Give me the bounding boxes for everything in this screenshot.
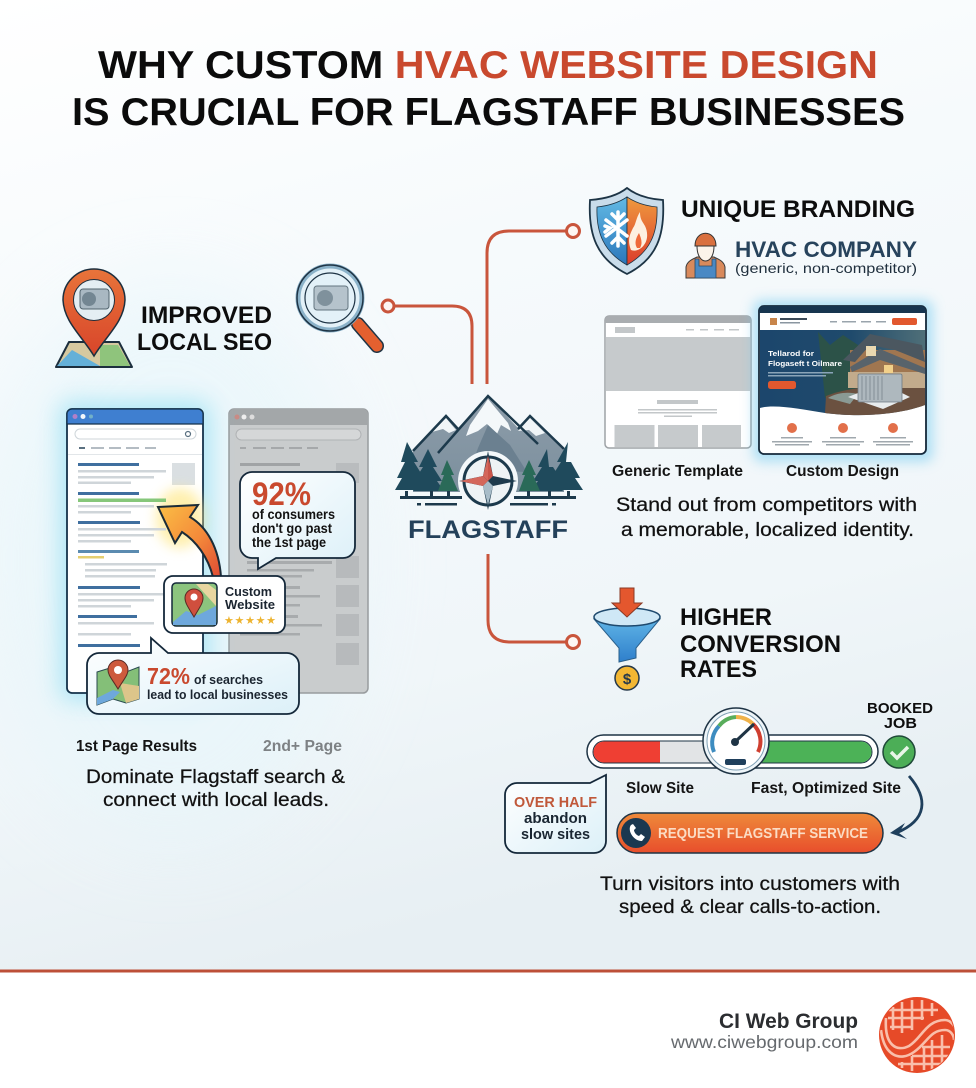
callout: 72% of searches [87,638,299,714]
panel: custom design website [753,300,933,462]
panel: custom design website: Tellarod for [768,349,814,358]
card: custom website: ★★★★★ [224,615,276,627]
footer: www.ciwebgroup.com [670,1032,858,1052]
heading: higher conversion rates: RATES [680,656,757,683]
card: custom website [164,576,285,633]
callout: 92% of consumers: 92% [252,476,311,512]
heading: higher conversion rates: HIGHER [680,604,772,631]
icon: booked job check: JOB [884,715,917,732]
callout: 92% of consumers: don't go past [252,521,332,536]
callout: 92% of consumers: the 1st page [252,535,326,550]
icon: booked job check: BOOKED [867,700,933,717]
text: hvac company [735,237,917,276]
heading: higher conversion rates: CONVERSION [680,631,841,658]
text: stand out from competitors: Stand out from competitors with [616,494,917,516]
labels: speed [626,780,901,797]
callout: 72% of searches: of searches [194,672,263,687]
text: stand out from competitors: a memorable, localized identity. [621,519,914,541]
callout: over half abandon: abandon [524,810,587,827]
heading: improved local seo: LOCAL SEO [137,329,272,356]
heading: unique branding: UNIQUE BRANDING [681,196,915,223]
text: dominate flagstaff [86,766,345,811]
card: custom website: Custom [225,584,272,599]
labels: speed: Fast, Optimized Site [751,780,901,797]
text: dominate flagstaff: connect with local leads. [103,789,329,811]
icon: booked job check [867,700,933,768]
text: turn visitors into customers [600,873,900,918]
icon: conversion funnel with coin [594,588,660,690]
title: IS CRUCIAL FOR FLAGSTAFF BUSINESSES [72,91,905,134]
callout: over half abandon: OVER HALF [514,794,597,811]
panel: custom design website: Flogaseft t Oilmare [768,359,842,368]
text: stand out from competitors [616,494,917,541]
labels: template comparison: Custom Design [786,463,899,480]
panel: 1st page browser [60,402,210,700]
text: turn visitors into customers: Turn visitors into customers with [600,873,900,895]
labels: template comparison: Generic Template [612,463,743,480]
panel: generic template [605,316,751,448]
callout: 72% of searches: 72% [147,663,190,689]
heading: improved local seo [137,302,272,356]
arrow: booked job to button [890,776,922,839]
icon: hot and cold shield [590,188,663,274]
chart: speed progress bar [587,708,878,774]
labels: speed: Slow Site [626,780,694,797]
text: hvac company: (generic, non-competitor) [735,260,917,276]
icon: hvac technician [686,233,725,278]
heading: higher conversion rates [680,604,841,683]
labels: page results: 1st Page Results [76,738,197,755]
title [72,44,905,134]
callout: 92% of consumers [240,472,355,569]
callout: 72% of searches: lead to local businesses [147,687,288,702]
logo: flagstaff mountains and compass: FLAGSTAFF [408,516,568,544]
card: custom website: Website [225,597,275,612]
logo: flagstaff mountains and compass [395,396,583,544]
icon: conversion funnel with coin: $ [623,671,632,688]
panel: 2nd page browser [229,409,368,693]
title: WHY CUSTOM HVAC WEBSITE DESIGN [98,44,878,87]
callout: 92% of consumers: of consumers [252,507,335,522]
text: hvac company: HVAC COMPANY [735,237,917,262]
button: request flagstaff service [617,813,883,853]
callout: over half abandon: slow sites [521,826,590,843]
labels: page results: 2nd+ Page [263,738,342,755]
text: dominate flagstaff: Dominate Flagstaff search & [86,766,345,788]
text: turn visitors into customers: speed & clear calls-to-action. [619,896,881,918]
labels: template comparison [612,463,899,480]
labels: page results [76,738,342,755]
button: request flagstaff service: REQUEST FLAGSTAFF SERVICE [658,825,868,842]
footer [0,970,976,1073]
icon: map pin with AC unit [56,269,132,367]
footer: CI Web Group [719,1010,858,1033]
arrow: orange curved arrow [158,505,221,577]
heading: improved local seo: IMPROVED [141,302,272,329]
connector lines from Flagstaff logo [382,224,580,648]
icon: magnifier with AC unit [297,265,377,346]
callout: over half abandon [505,775,606,853]
